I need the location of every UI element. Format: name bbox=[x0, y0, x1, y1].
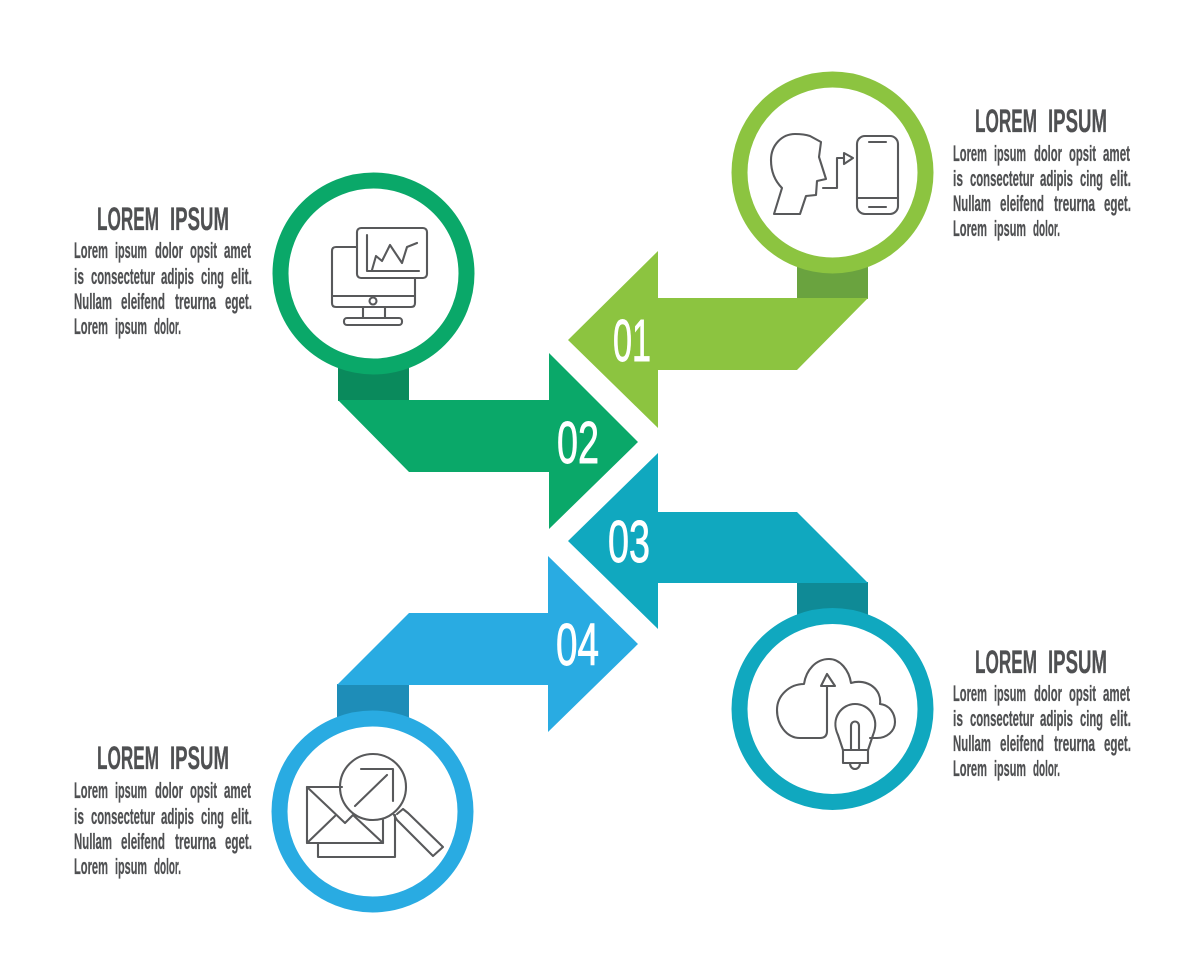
arrow 04 bbox=[337, 556, 638, 732]
body text 02: is bbox=[74, 264, 84, 289]
arrow 03 bbox=[568, 453, 868, 629]
body text 02: consectetur bbox=[91, 264, 155, 289]
body text 03: ipsum bbox=[994, 681, 1026, 706]
body text 03: treurna bbox=[1054, 731, 1095, 756]
body text 03: Lorem bbox=[953, 756, 987, 781]
number 02: 02 bbox=[557, 410, 599, 476]
body text 04: Lorem bbox=[74, 854, 108, 879]
body text 02: dolor bbox=[155, 238, 183, 263]
body text 01: elit. bbox=[1110, 166, 1131, 191]
body text 03: dolor. bbox=[1033, 756, 1060, 781]
heading 02: LOREM bbox=[97, 201, 159, 237]
body text 03: amet bbox=[1103, 681, 1130, 706]
body text 01: ipsum bbox=[994, 216, 1026, 241]
body text 03 bbox=[953, 681, 1131, 781]
arrow 02 bbox=[338, 353, 638, 529]
body text 03: eget. bbox=[1104, 731, 1131, 756]
ring 03 bbox=[740, 616, 926, 802]
number 04: 04 bbox=[556, 612, 599, 678]
body text 03: cing bbox=[1080, 706, 1103, 731]
connector stub 01 bbox=[797, 255, 868, 299]
body text 02: Lorem bbox=[74, 314, 108, 339]
heading 03: IPSUM bbox=[1048, 644, 1107, 680]
body text 01: is bbox=[953, 166, 963, 191]
body text 02: amet bbox=[224, 238, 251, 263]
body text 03: dolor bbox=[1034, 681, 1062, 706]
body text 03: eleifend bbox=[1000, 731, 1044, 756]
body text 01: Lorem bbox=[953, 216, 987, 241]
icon: envelope and magnifier bbox=[307, 754, 443, 857]
icon: monitor with chart bbox=[332, 228, 427, 325]
body text 04: cing bbox=[201, 804, 224, 829]
body text 02: eget. bbox=[225, 289, 252, 314]
body text 02: treurna bbox=[175, 289, 216, 314]
body text 02: eleifend bbox=[121, 289, 165, 314]
heading 04: LOREM bbox=[97, 740, 159, 776]
body text 02: ipsum bbox=[115, 238, 147, 263]
ring 04 bbox=[280, 718, 466, 904]
body text 04: is bbox=[74, 804, 84, 829]
body text 04: adipis bbox=[161, 804, 194, 829]
body text 01: amet bbox=[1103, 141, 1130, 166]
panel: step 01 bbox=[568, 80, 926, 428]
body text 03: adipis bbox=[1040, 706, 1073, 731]
text block: step 02 bbox=[74, 201, 252, 339]
body text 01: dolor. bbox=[1033, 216, 1060, 241]
body text 01: opsit bbox=[1069, 141, 1096, 166]
connector stub 03 bbox=[797, 582, 868, 628]
body text 03: Lorem bbox=[953, 681, 987, 706]
body text 01: cing bbox=[1080, 166, 1103, 191]
body text 02 bbox=[74, 238, 252, 339]
body text 02: ipsum bbox=[115, 314, 147, 339]
icon: head speaking to phone bbox=[771, 134, 898, 214]
body text 01: Lorem bbox=[953, 141, 987, 166]
body text 04: opsit bbox=[190, 778, 217, 803]
body text 04: eget. bbox=[225, 829, 252, 854]
body text 04: dolor. bbox=[154, 854, 181, 879]
body text 01: eget. bbox=[1104, 191, 1131, 216]
body text 01: treurna bbox=[1054, 191, 1095, 216]
body text 04: eleifend bbox=[121, 829, 165, 854]
connector stub 04 bbox=[337, 684, 409, 730]
body text 04: dolor bbox=[155, 778, 183, 803]
ring 01 bbox=[740, 80, 926, 266]
body text 03: consectetur bbox=[970, 706, 1034, 731]
body text 02: elit. bbox=[231, 264, 252, 289]
body text 02: adipis bbox=[161, 264, 194, 289]
connector stub 02 bbox=[338, 355, 409, 401]
heading 01: LOREM bbox=[975, 103, 1037, 139]
heading 01: IPSUM bbox=[1048, 103, 1107, 139]
body text 03: ipsum bbox=[994, 756, 1026, 781]
heading 03: LOREM bbox=[975, 644, 1037, 680]
panel: step 04 bbox=[280, 556, 638, 904]
body text 01: adipis bbox=[1040, 166, 1073, 191]
body text 03: Nullam bbox=[953, 731, 991, 756]
body text 04: elit. bbox=[231, 804, 252, 829]
panel: step 03 bbox=[568, 453, 926, 802]
body text 02: opsit bbox=[190, 238, 217, 263]
body text 04: amet bbox=[224, 778, 251, 803]
body text 01: eleifend bbox=[1000, 191, 1044, 216]
heading 04: IPSUM bbox=[170, 740, 229, 776]
icon: cloud and light bulb bbox=[777, 659, 895, 769]
body text 02: dolor. bbox=[154, 314, 181, 339]
ring 02 bbox=[280, 180, 466, 366]
heading 02: IPSUM bbox=[170, 201, 229, 237]
body text 04: consectetur bbox=[91, 804, 155, 829]
body text 01: Nullam bbox=[953, 191, 991, 216]
number 03: 03 bbox=[608, 509, 650, 575]
body text 04: ipsum bbox=[115, 854, 147, 879]
body text 03: opsit bbox=[1069, 681, 1096, 706]
body text 01: dolor bbox=[1034, 141, 1062, 166]
body text 02: cing bbox=[201, 264, 224, 289]
body text 04: Lorem bbox=[74, 778, 108, 803]
number 01: 01 bbox=[613, 308, 651, 374]
body text 01 bbox=[953, 141, 1131, 241]
body text 03: elit. bbox=[1110, 706, 1131, 731]
body text 02: Nullam bbox=[74, 289, 112, 314]
body text 04: treurna bbox=[175, 829, 216, 854]
body text 04: Nullam bbox=[74, 829, 112, 854]
body text 01: ipsum bbox=[994, 141, 1026, 166]
text block: step 03 bbox=[953, 644, 1131, 781]
text block: step 04 bbox=[74, 740, 252, 879]
arrow 01 bbox=[568, 251, 868, 428]
body text 04: ipsum bbox=[115, 778, 147, 803]
panel: step 02 bbox=[280, 180, 638, 529]
body text 03: is bbox=[953, 706, 963, 731]
body text 04 bbox=[74, 778, 252, 879]
body text 02: Lorem bbox=[74, 238, 108, 263]
text block: step 01 bbox=[953, 103, 1131, 241]
body text 01: consectetur bbox=[970, 166, 1034, 191]
